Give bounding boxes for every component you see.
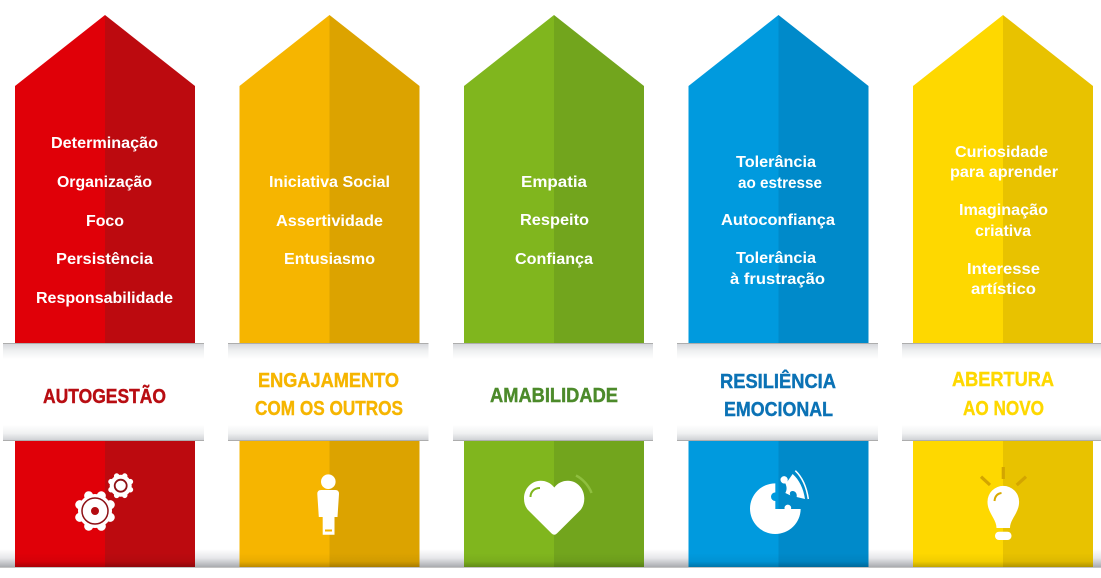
heading: engajamento com os outros: ENGAJAMENTO bbox=[258, 370, 399, 392]
text block: autogestão skills bbox=[36, 135, 173, 307]
band: autogestão heading band bbox=[3, 343, 204, 441]
bottom shadow strip bbox=[0, 549, 1101, 568]
text block: abertura skills: artístico bbox=[971, 281, 1036, 298]
text block: abertura skills bbox=[950, 144, 1058, 298]
heading: engajamento com os outros: COM OS OUTROS bbox=[255, 398, 403, 420]
text block: engajamento skills: Assertividade bbox=[276, 213, 383, 230]
text block: abertura skills: criativa bbox=[975, 223, 1031, 240]
heading: resiliência emocional: RESILIÊNCIA bbox=[720, 369, 836, 393]
text block: autogestão skills: Foco bbox=[86, 213, 124, 230]
panel: autogestão bbox=[3, 15, 204, 567]
text block: resiliência skills: Autoconfiança bbox=[721, 212, 835, 229]
arrow: yellow column bbox=[913, 15, 1093, 343]
text block: amabilidade skills: Respeito bbox=[520, 212, 589, 229]
text block: abertura skills: Curiosidade bbox=[955, 144, 1048, 161]
text block: abertura skills: Imaginação bbox=[959, 202, 1048, 219]
base: yellow column bottom bbox=[913, 441, 1093, 567]
text block: autogestão skills: Organização bbox=[57, 174, 152, 191]
icon: person bbox=[317, 474, 339, 535]
base: blue column bottom bbox=[688, 441, 868, 567]
text block: resiliência skills: Tolerância bbox=[736, 250, 816, 267]
panel: engajamento com os outros bbox=[228, 15, 428, 567]
heading: abertura ao novo: ABERTURA bbox=[952, 369, 1054, 391]
band: abertura heading band bbox=[902, 343, 1101, 441]
band: engajamento heading band bbox=[228, 343, 428, 441]
heading: engajamento com os outros bbox=[255, 370, 403, 420]
panel: amabilidade bbox=[453, 15, 653, 567]
text block: abertura skills: Interesse bbox=[967, 261, 1040, 278]
text block: autogestão skills: Persistência bbox=[56, 251, 153, 268]
icon: heart bbox=[524, 476, 592, 535]
text block: resiliência skills bbox=[721, 154, 835, 288]
text block: resiliência skills: à frustração bbox=[730, 271, 825, 288]
heading: abertura ao novo: AO NOVO bbox=[963, 398, 1044, 420]
text block: abertura skills: para aprender bbox=[950, 164, 1058, 181]
base: green column bottom bbox=[464, 441, 644, 567]
text block: engajamento skills: Entusiasmo bbox=[284, 251, 375, 268]
heading: autogestão: AUTOGESTÃO bbox=[43, 385, 166, 408]
band: amabilidade heading band bbox=[453, 343, 653, 441]
arrow: green column bbox=[464, 15, 644, 343]
heading: abertura ao novo bbox=[952, 369, 1054, 420]
panel: abertura ao novo bbox=[902, 15, 1101, 567]
heading: amabilidade: AMABILIDADE bbox=[490, 385, 618, 407]
arrow: blue column bbox=[688, 15, 868, 343]
arrow: red column bbox=[15, 15, 195, 343]
text block: autogestão skills: Responsabilidade bbox=[36, 290, 173, 307]
heading: resiliência emocional bbox=[720, 369, 836, 421]
panel: resiliência emocional bbox=[677, 15, 878, 567]
text block: amabilidade skills: Empatia bbox=[521, 174, 587, 191]
text block: engajamento skills: Iniciativa Social bbox=[269, 174, 390, 191]
base: red column bottom bbox=[15, 441, 195, 567]
text block: amabilidade skills bbox=[515, 174, 593, 268]
icon: gears bbox=[73, 472, 134, 533]
heading: resiliência emocional: EMOCIONAL bbox=[724, 399, 833, 421]
text block: autogestão skills: Determinação bbox=[51, 135, 158, 152]
base: amber column bottom bbox=[240, 441, 420, 567]
text block: engajamento skills bbox=[269, 174, 390, 268]
icon: light bulb bbox=[981, 467, 1026, 540]
text block: resiliência skills: Tolerância bbox=[736, 154, 816, 171]
icon: puzzle bbox=[750, 471, 808, 534]
text block: amabilidade skills: Confiança bbox=[515, 251, 593, 268]
band: resiliência heading band bbox=[677, 343, 878, 441]
text block: resiliência skills: ao estresse bbox=[738, 175, 822, 192]
arrow: amber column bbox=[240, 15, 420, 343]
